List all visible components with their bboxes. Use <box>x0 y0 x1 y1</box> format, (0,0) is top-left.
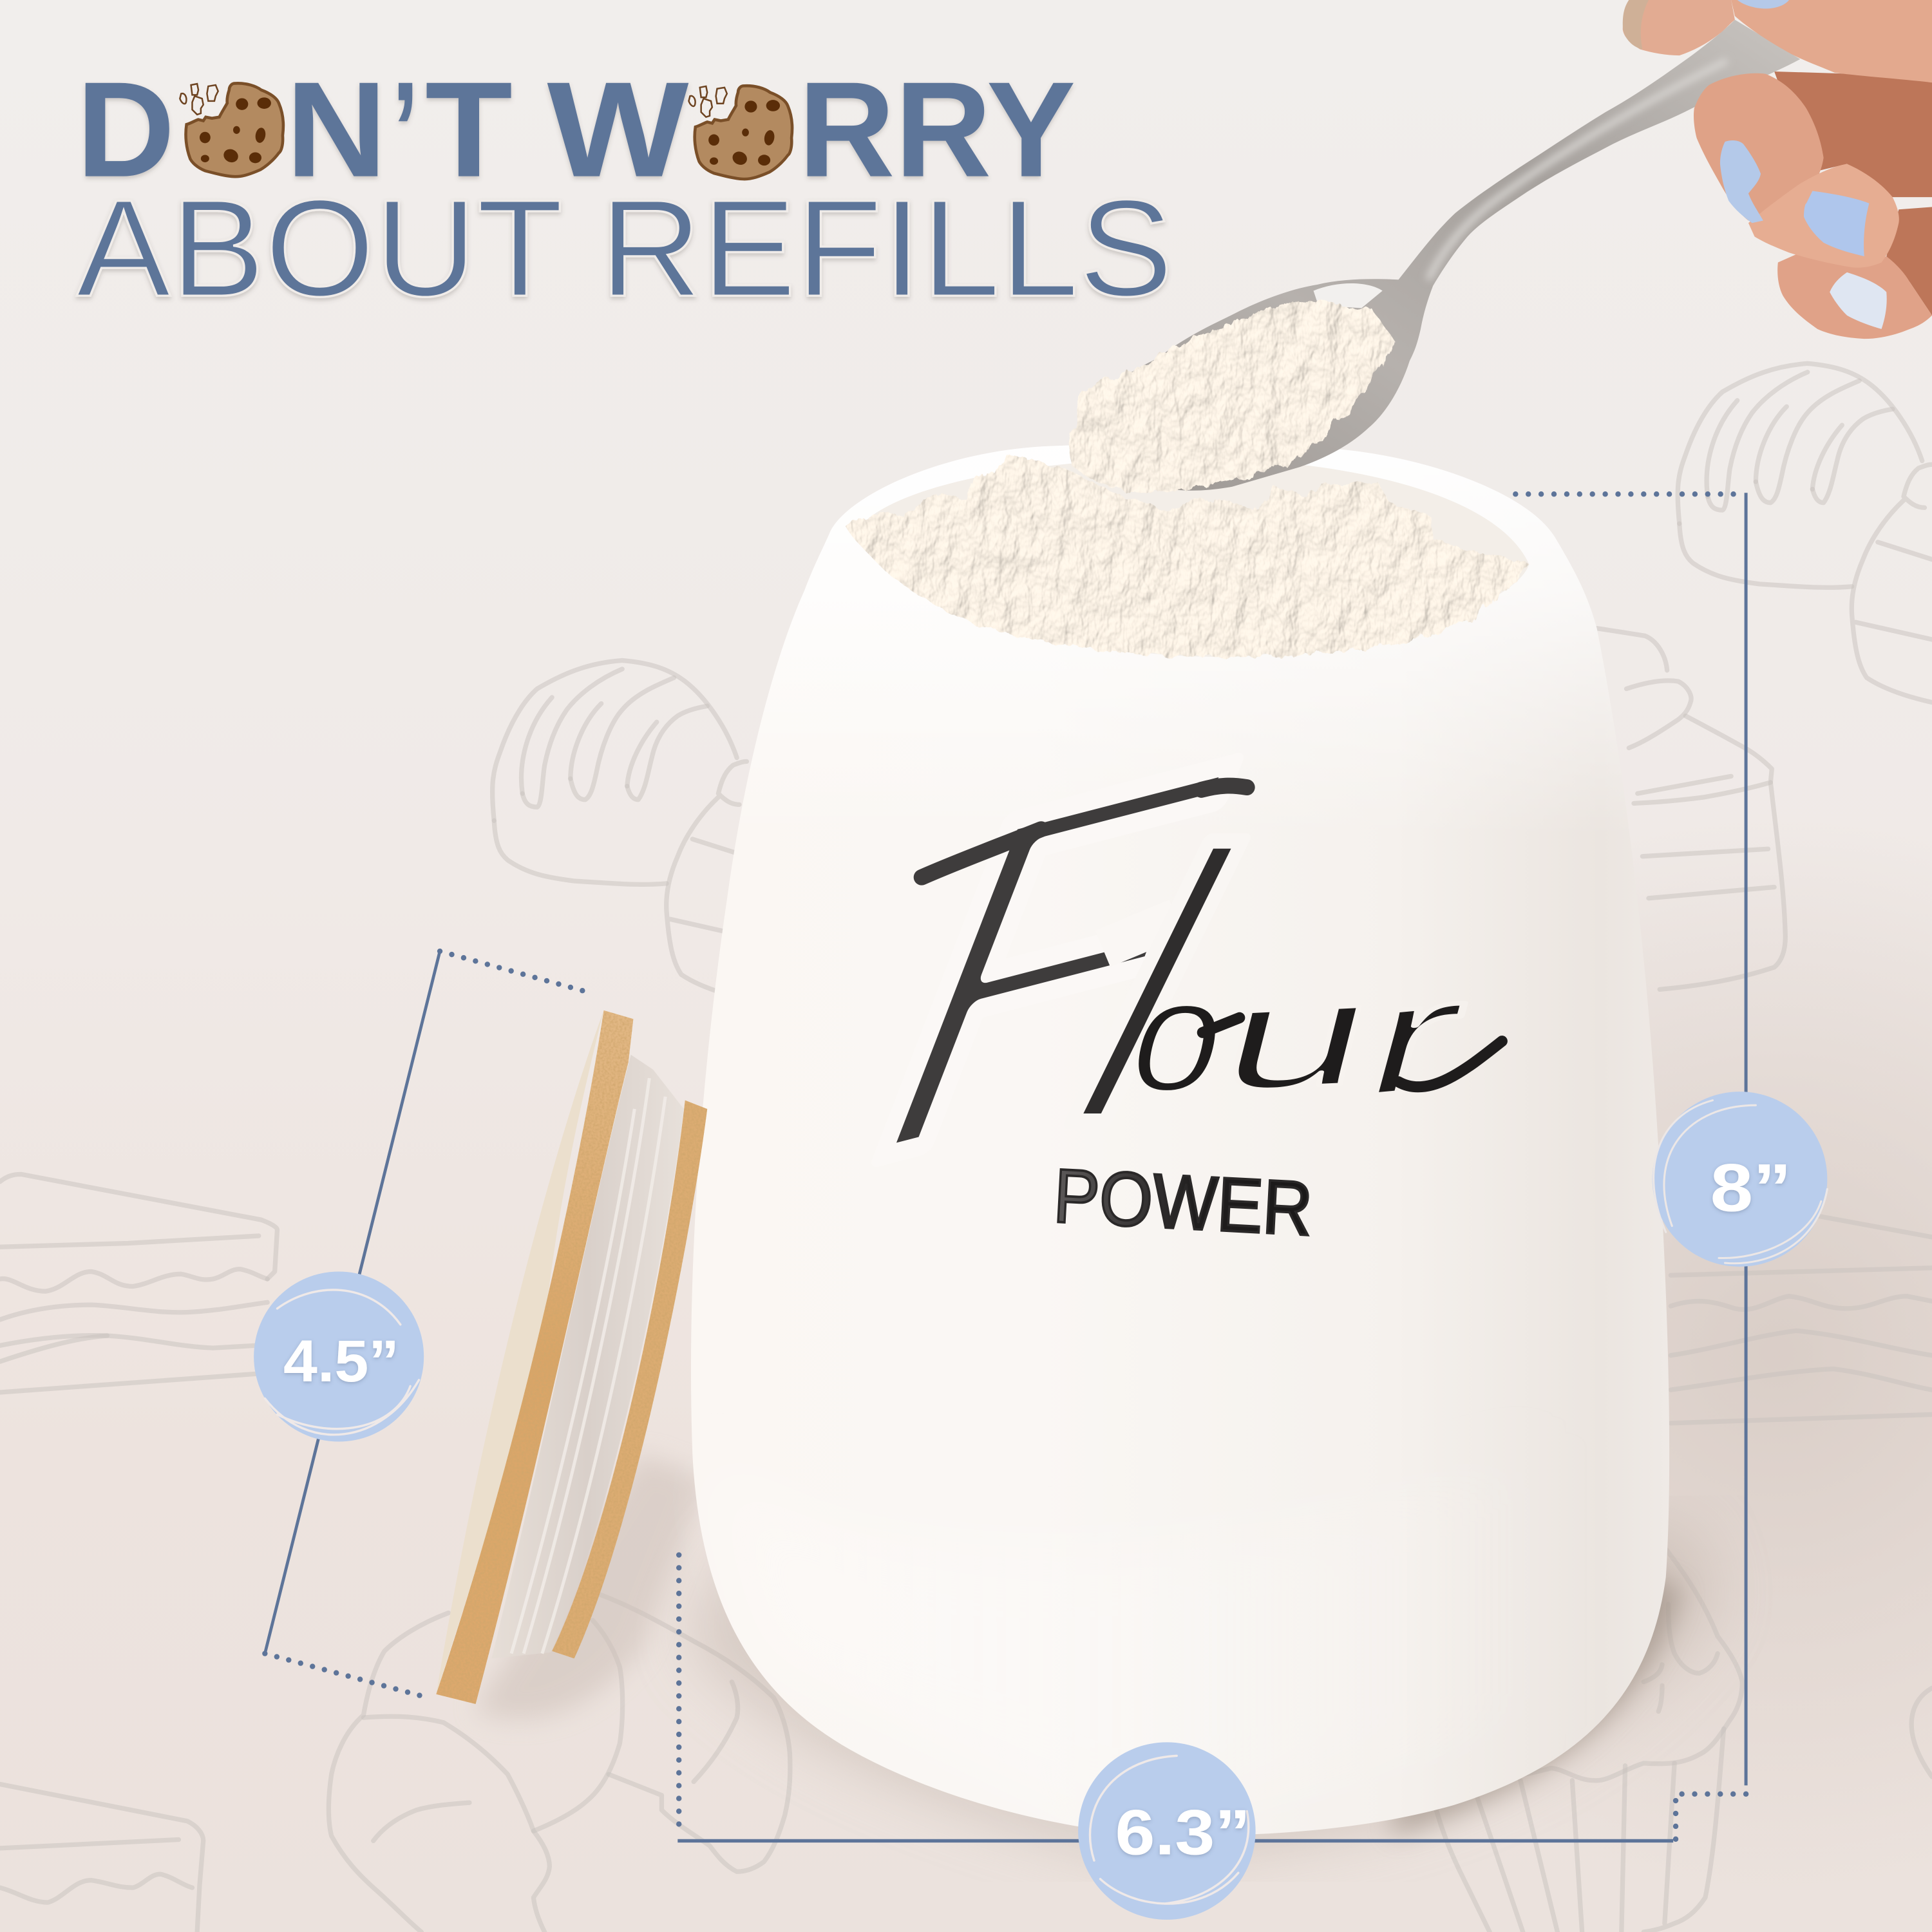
heading line 1: T <box>425 53 513 205</box>
heading line 1 <box>77 53 1075 205</box>
heading line 1: N <box>286 53 387 205</box>
lid outer face <box>436 1010 604 1694</box>
icon: cookie O in DON'T <box>180 83 283 176</box>
icon: cake slice bottom left <box>0 1784 204 1932</box>
finger: ring <box>1777 252 1932 339</box>
badge: 4.5 inches: 4.5” <box>283 1329 399 1394</box>
finger: top palm <box>1731 0 1932 82</box>
jar body <box>691 444 1669 1836</box>
icon: cake slice left <box>0 1174 277 1392</box>
badge: 6.3 inches <box>1078 1742 1256 1920</box>
badge: 8 inches <box>1653 1092 1827 1267</box>
heading line 2: ABOUT REFILLS <box>77 171 1173 325</box>
flour in jar <box>843 456 1529 657</box>
icon: pastry top right <box>1678 363 1932 703</box>
finger: middle <box>1748 164 1899 268</box>
badge: 6.3 inches: 6.3” <box>1115 1797 1251 1868</box>
nails <box>1720 0 1887 329</box>
heading line 1: D <box>77 53 175 205</box>
icon: croissant <box>328 1592 790 1932</box>
icon: cake slice behind jar <box>1597 629 1785 989</box>
label: POWER: POWER <box>1052 1153 1314 1252</box>
finger: index <box>1694 73 1824 222</box>
flour in spoon <box>1069 299 1392 493</box>
icon: cake slice right <box>1671 1216 1932 1423</box>
heading line 1: RRY <box>799 53 1075 205</box>
lid outer bamboo band <box>436 1010 633 1704</box>
heading line 1: W <box>547 53 689 205</box>
label: Flour <box>806 654 1502 1269</box>
silicone seal <box>491 1055 684 1658</box>
badge: 8 inches: 8” <box>1710 1151 1792 1226</box>
spoon and hand <box>1069 0 1932 493</box>
hand back <box>1774 71 1932 316</box>
badge: 4.5 inches <box>254 1271 424 1442</box>
label: Flour: r <box>1346 943 1484 1131</box>
icon: cupcake bottom right <box>1434 1548 1742 1932</box>
jar opening <box>862 459 1529 657</box>
dimension: width 6.3 inches <box>677 1555 1673 1920</box>
label: Flour: F <box>806 654 1292 1269</box>
spoon <box>1084 20 1800 491</box>
title <box>77 53 1173 325</box>
dimension: lid diameter 4.5 inches <box>254 951 591 1698</box>
icon: pastry centre-left <box>493 661 746 999</box>
label: Flour: l <box>1007 772 1301 1204</box>
label: Flour: u <box>1206 950 1391 1122</box>
label: Flour: o <box>1115 946 1245 1125</box>
panel: bamboo lid <box>436 1010 707 1704</box>
dimension: height 8 inches <box>1515 493 1827 1846</box>
jar floor shadows <box>475 1454 1712 1850</box>
heading line 1: ’ <box>392 53 419 205</box>
panel: ceramic jar <box>691 444 1669 1836</box>
finger: thumb <box>1623 0 1735 55</box>
lid inner bamboo ring <box>552 1101 707 1658</box>
icon: cookie O in WORRY <box>689 86 792 179</box>
icon: pastry edge bottom right <box>1911 1688 1932 1777</box>
